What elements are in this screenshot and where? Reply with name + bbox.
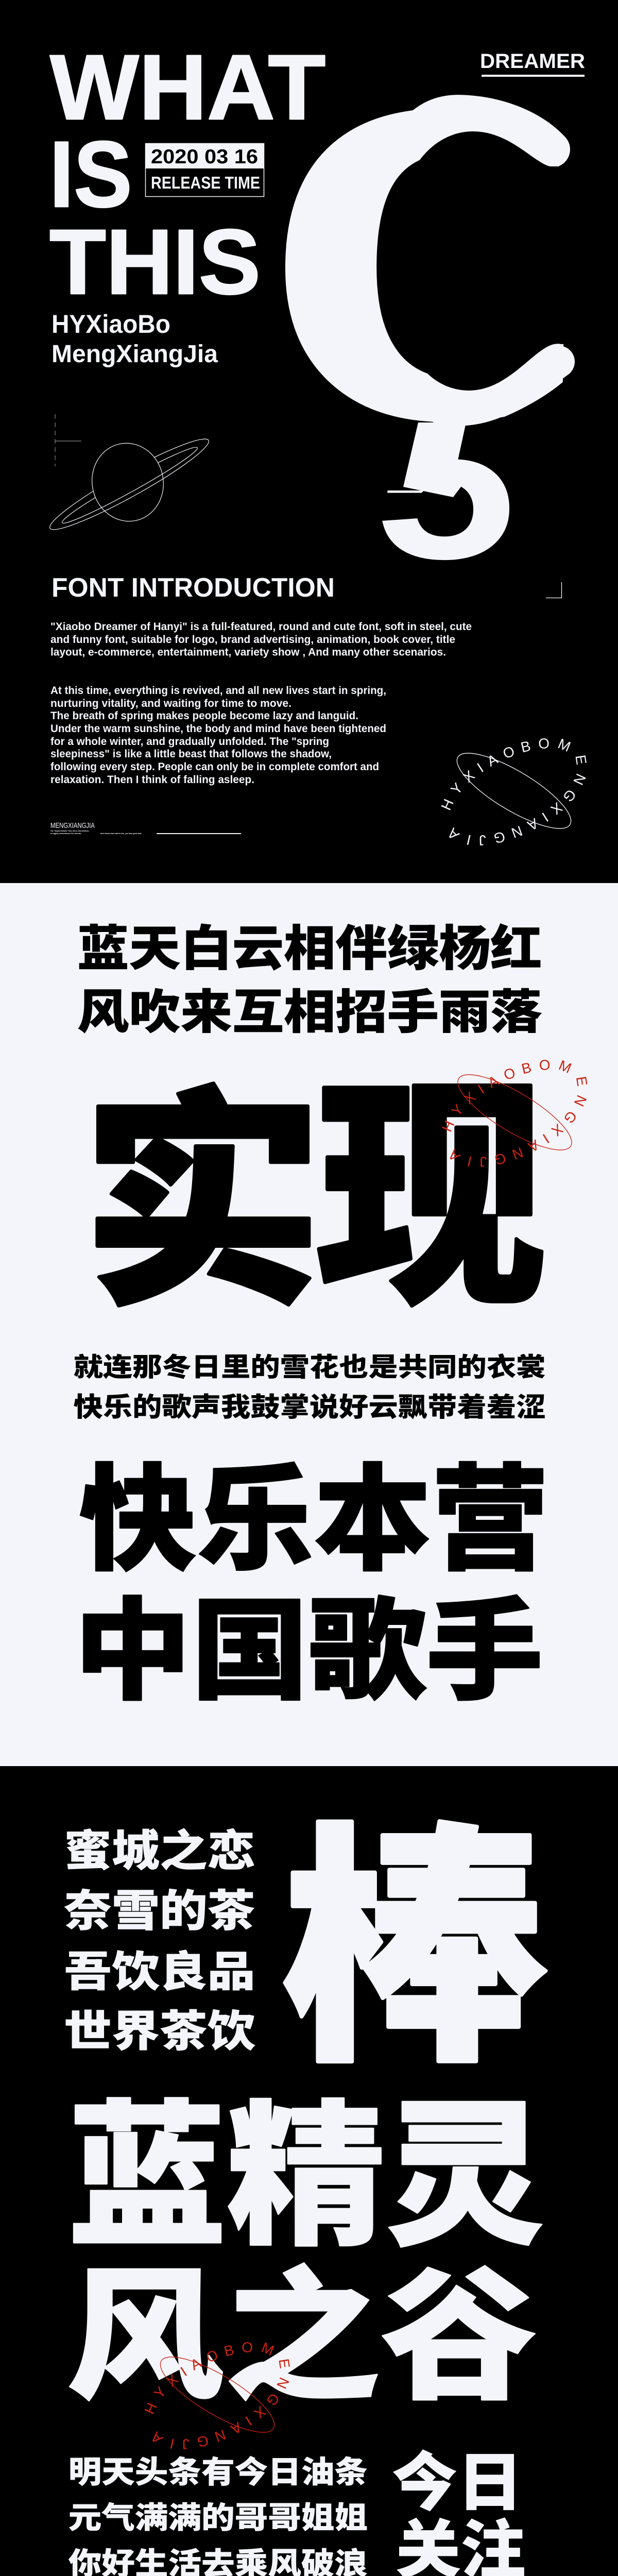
panel: black cover introduction — [49, 19, 587, 845]
title: WHAT IS THIS: WHAT — [50, 36, 325, 139]
badge: red circular text: HYXIAOBOMENGXIANGJIA — [442, 1060, 587, 1167]
text block: introduction paragraph two: relaxation. Then I think of falling asleep. — [50, 774, 254, 786]
big specimen: 快乐本营 中国歌手: 快乐本营 — [79, 1456, 549, 1585]
text block: introduction paragraph one: "Xiaobo Dreamer of Hanyi" is a full-featured, round and cute font, soft in steel, cute — [50, 621, 472, 633]
footnote with rule: The "Xiaobo Dreamer" font, this is very delicious, — [50, 829, 89, 832]
specimen lines: blue sky: 蓝天白云相伴绿杨红 — [77, 922, 542, 976]
big specimen: 实现: 现 — [316, 1063, 546, 1334]
specimen lines: headlines: 明天头条有今日油条 — [68, 2455, 368, 2490]
specimen lines: tea brands — [64, 1827, 255, 2056]
corner bracket — [546, 582, 561, 598]
footnote with rule — [50, 821, 241, 835]
big specimen: 快乐本营 中国歌手 — [74, 1456, 549, 1714]
text block: introduction paragraph two: sleepiness" is like a little beast that follows the shadow, — [50, 748, 332, 760]
big specimen: 实现: 实 — [81, 1076, 323, 1333]
text block: introduction paragraph one — [50, 621, 472, 658]
footnote with rule: their friends have said to him, you have good taste — [100, 832, 142, 835]
label: release date box: RELEASE TIME — [151, 173, 260, 192]
specimen lines: tea brands: 奈雪的茶 — [64, 1887, 255, 1936]
text block: introduction paragraph two: following every step. People can only be in complete comfort and — [50, 761, 379, 773]
icon: ringed planet — [44, 414, 215, 539]
giant C with cedilla: C — [275, 19, 586, 501]
giant C with cedilla: 5 — [374, 363, 517, 604]
big specimen: 蓝精灵 风之谷: 风之谷 — [66, 2258, 538, 2417]
specimen lines: headlines: 元气满满的哥哥姐姐 — [68, 2501, 368, 2535]
big specimen: 实现 — [81, 1063, 546, 1334]
big specimen: 快乐本营 中国歌手: 中国歌手 — [74, 1589, 543, 1714]
specimen lines: snowflakes — [74, 1353, 545, 1422]
text block: introduction paragraph two: The breath of spring makes people become lazy and languid. — [50, 710, 358, 722]
text block: introduction paragraph two: nurturing vitality, and waiting for time to move. — [50, 698, 291, 709]
heading: font introduction: FONT INTRODUCTION — [52, 573, 335, 603]
footnote with rule: MENGXIANGJIA — [50, 821, 95, 830]
specimen lines: snowflakes: 就连那冬日里的雪花也是共同的衣裳 — [74, 1353, 545, 1382]
specimen lines: tea brands: 蜜城之恋 — [64, 1827, 255, 1875]
text block: introduction paragraph two: Under the warm sunshine, the body and mind have been tightened — [50, 723, 386, 735]
footnote with rule: to highly recommend it to friends, — [50, 832, 81, 835]
specimen lines: snowflakes: 快乐的歌声我鼓掌说好云飘带着羞涩 — [74, 1393, 545, 1422]
specimen lines: tea brands: 世界茶饮 — [64, 2007, 255, 2056]
big specimen: 棒: 棒 — [280, 1809, 547, 2092]
title: WHAT IS THIS: THIS — [49, 211, 261, 314]
specimen lines: blue sky: 风吹来互相招手雨落 — [77, 986, 542, 1039]
panel: black specimen two — [64, 1809, 548, 2576]
label: DREAMER with underline: DREAMER — [480, 50, 585, 73]
font name: MengXiangJia — [52, 341, 218, 368]
panel: light specimen one — [0, 883, 618, 1766]
text block: introduction paragraph two: for a whole winter, and gradually unfolded. The "spring — [50, 736, 329, 748]
font name: HYXiaoBo — [52, 310, 170, 338]
title: WHAT IS THIS: IS — [49, 123, 132, 227]
badge: circular text with ellipse: HYXIAOBOMENGXIANGJIA — [441, 738, 587, 845]
label: release date box — [145, 143, 264, 197]
specimen lines: tea brands: 吾饮良品 — [64, 1948, 255, 1995]
specimen lines: blue sky — [77, 922, 542, 1039]
specimen: 今日关注 — [392, 2448, 525, 2576]
text block: introduction paragraph two — [50, 685, 386, 786]
text block: introduction paragraph two: At this time, everything is revived, and all new lives start in spring, — [50, 685, 386, 697]
text block: introduction paragraph one: and funny font, suitable for logo, brand advertising, animation, book cover, title — [50, 634, 455, 646]
big specimen: 蓝精灵 风之谷: 蓝精灵 — [67, 2090, 545, 2264]
specimen lines: headlines — [68, 2455, 368, 2576]
title: WHAT IS THIS — [49, 36, 325, 314]
font name — [52, 310, 218, 368]
big specimen: 蓝精灵 风之谷 — [66, 2090, 545, 2417]
label: release date box: 2020 03 16 — [151, 146, 258, 168]
text block: introduction paragraph one: layout, e-commerce, entertainment, variety show , And many other scenarios. — [50, 646, 446, 658]
badge: red circular text: HYXIAOBOMENGXIANGJIA — [144, 2342, 290, 2449]
specimen: 今日关注: 今日 — [392, 2448, 523, 2518]
